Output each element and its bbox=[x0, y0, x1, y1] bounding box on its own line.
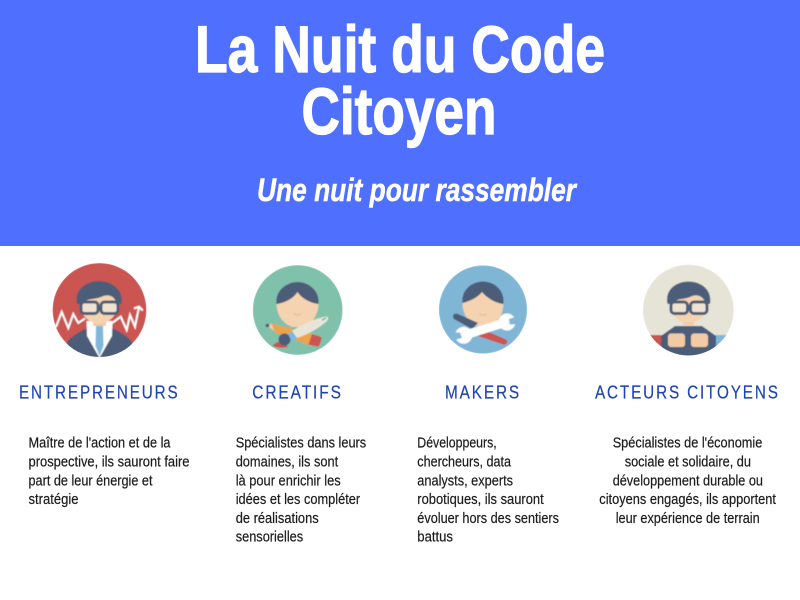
panel: acteurs citoyens bbox=[595, 264, 780, 527]
text: acteurs citoyens description bbox=[599, 436, 776, 527]
panel: entrepreneurs bbox=[19, 263, 190, 508]
text: entrepreneurs description: part de leur énergie et bbox=[28, 473, 152, 489]
text: makers description: chercheurs, data bbox=[417, 454, 512, 470]
text: acteurs citoyens description: Spécialistes de l'économie bbox=[613, 436, 762, 452]
text: entrepreneurs description: prospective, ils sauront faire bbox=[28, 454, 190, 470]
text: creatifs description: idées et les compléter bbox=[236, 492, 360, 508]
text: creatifs description: sensorielles bbox=[236, 530, 303, 546]
text: makers description: analysts, experts bbox=[417, 473, 513, 489]
text: creatifs description: Spécialistes dans leurs bbox=[236, 436, 366, 452]
text: creatifs description bbox=[236, 436, 366, 546]
title: La Nuit du Code bbox=[195, 12, 605, 86]
icon: entrepreneur with chart bbox=[52, 263, 146, 358]
heading: makers: MAKERS bbox=[445, 382, 521, 402]
text: creatifs description: là pour enrichir les bbox=[236, 473, 341, 489]
title: Citoyen bbox=[302, 74, 496, 148]
heading: entrepreneurs: ENTREPRENEURS bbox=[19, 382, 180, 402]
text: acteurs citoyens description: leur expérience de terrain bbox=[616, 511, 760, 527]
text: entrepreneurs description: stratégie bbox=[28, 492, 78, 508]
icon: maker with wrench and screwdriver bbox=[439, 265, 527, 354]
icon: citizen with glasses bbox=[643, 264, 734, 356]
heading: creatifs: CREATIFS bbox=[252, 382, 343, 402]
icon: creative with pencil and brush bbox=[253, 265, 343, 355]
text: creatifs description: domaines, ils sont bbox=[236, 454, 338, 470]
text: entrepreneurs description bbox=[28, 436, 190, 508]
text: makers description: évoluer hors des sentiers bbox=[417, 511, 559, 527]
text: makers description bbox=[417, 436, 559, 546]
text: acteurs citoyens description: développement durable ou bbox=[613, 473, 763, 489]
text: creatifs description: de réalisations bbox=[236, 511, 319, 527]
text: makers description: Développeurs, bbox=[417, 436, 497, 452]
panel: creatifs bbox=[236, 265, 366, 546]
text: makers description: robotiques, ils sauront bbox=[417, 492, 544, 508]
subtitle: Une nuit pour rassembler bbox=[257, 172, 577, 208]
title bbox=[195, 12, 605, 148]
panel: makers bbox=[417, 265, 559, 546]
text: makers description: battus bbox=[417, 530, 453, 546]
text: entrepreneurs description: Maître de l'action et de la bbox=[28, 436, 171, 452]
text: acteurs citoyens description: citoyens engagés, ils apportent bbox=[599, 492, 776, 508]
panel: blue header bbox=[0, 0, 800, 246]
text: acteurs citoyens description: sociale et solidaire, du bbox=[625, 454, 751, 470]
